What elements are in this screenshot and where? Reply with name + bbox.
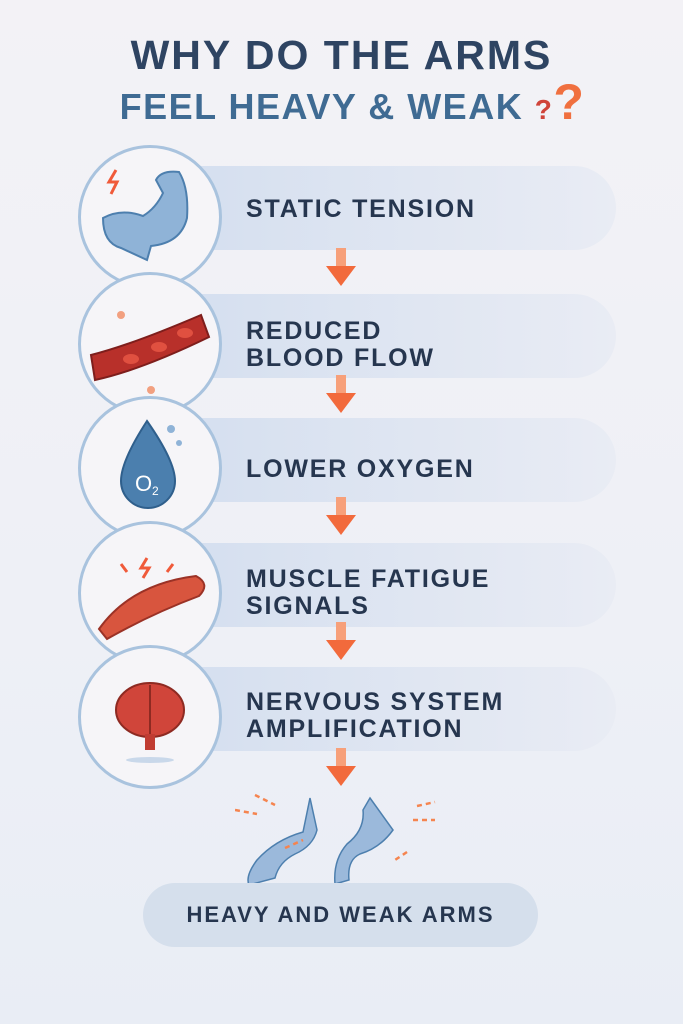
icon: water drop O2	[78, 396, 222, 540]
arrow	[326, 497, 356, 535]
title: WHY DO THE ARMS	[131, 32, 552, 78]
panel: nervous system: NERVOUS SYSTEM	[246, 688, 504, 716]
title	[120, 32, 585, 130]
arrow	[326, 375, 356, 413]
title: FEEL HEAVY & WEAK ??	[120, 74, 585, 130]
panel: reduced blood flow: REDUCED	[246, 317, 382, 345]
icon: blood vessel	[78, 272, 222, 416]
final outcome pill	[143, 883, 538, 947]
panel: lower oxygen	[78, 396, 584, 530]
panel: muscle fatigue: SIGNALS	[246, 592, 370, 620]
panel: muscle fatigue: MUSCLE FATIGUE	[246, 565, 490, 593]
panel: nervous system	[78, 645, 538, 789]
icon: water drop O2: O	[135, 471, 152, 496]
final outcome pill: HEAVY AND WEAK ARMS	[186, 902, 495, 927]
icon: water drop O2: 2	[152, 484, 159, 498]
icon: flexed arm	[78, 145, 222, 289]
panel: reduced blood flow: BLOOD FLOW	[246, 344, 435, 372]
icon: drooping arms	[235, 794, 436, 883]
arrow	[326, 748, 356, 786]
panel: muscle fatigue	[78, 521, 564, 655]
panel: static tension: STATIC TENSION	[246, 195, 476, 223]
icon: muscle	[78, 521, 222, 665]
icon: brain	[78, 645, 222, 789]
arrow	[326, 248, 356, 286]
arrow	[326, 622, 356, 660]
panel: static tension	[78, 145, 616, 280]
panel: reduced blood flow	[78, 272, 604, 406]
panel: nervous system: AMPLIFICATION	[246, 715, 463, 743]
panel: lower oxygen: LOWER OXYGEN	[246, 455, 475, 483]
